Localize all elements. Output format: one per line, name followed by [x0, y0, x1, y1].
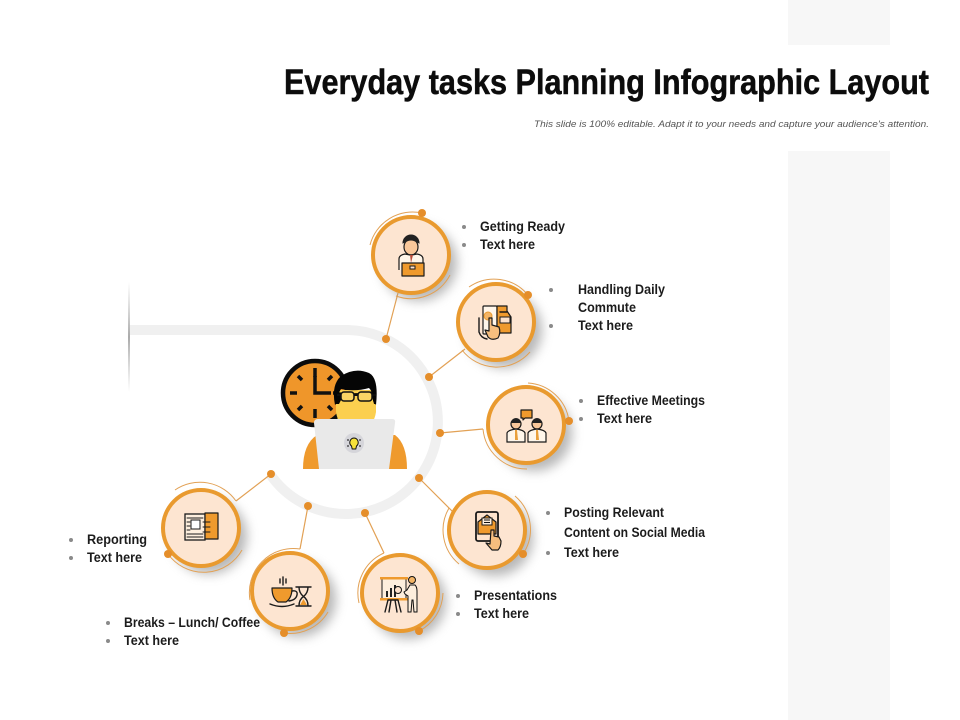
- node 6: breaks: [249, 548, 336, 637]
- icon: person: [303, 371, 407, 469]
- icon: tablet with mail and hand: [476, 512, 501, 550]
- node 2: handling daily commute: [458, 279, 542, 368]
- label: handling daily commute: Handling Daily: [578, 282, 665, 297]
- node 5: presentations: [358, 553, 446, 639]
- label: effective meetings: Effective Meetings: [597, 393, 705, 408]
- label: posting relevant content: Posting Relevant: [564, 505, 664, 520]
- right side grey panel: [788, 0, 890, 720]
- node 3: effective meetings: [483, 383, 573, 471]
- label: getting ready: [462, 219, 565, 252]
- icon: report documents: [185, 513, 218, 540]
- label: breaks: Text here: [124, 633, 179, 648]
- label: posting relevant content: [546, 505, 705, 560]
- label: handling daily commute: [549, 282, 665, 333]
- icon: coffee cup and hourglass: [270, 577, 311, 606]
- label: presentations: [456, 588, 557, 621]
- subtitle: This slide is 100% editable. Adapt it to your needs and capture your audience's attention.: [534, 119, 929, 130]
- central ring track: [128, 282, 438, 514]
- label: presentations: Text here: [474, 606, 529, 621]
- label: effective meetings: Text here: [597, 411, 652, 426]
- node 1: getting ready: [370, 209, 457, 301]
- icon: two people talking: [507, 410, 546, 442]
- label: breaks: [106, 615, 260, 648]
- label: reporting: Reporting: [87, 532, 147, 547]
- node 4: posting relevant content: [443, 492, 533, 576]
- label: reporting: [69, 532, 147, 565]
- label: presentations: Presentations: [474, 588, 557, 603]
- label: effective meetings: [579, 393, 705, 426]
- icon: clock: [283, 361, 347, 425]
- central figure: person with clock and laptop: [283, 361, 407, 469]
- label: breaks: Breaks – Lunch/ Coffee: [124, 615, 260, 630]
- label: handling daily commute: Text here: [578, 318, 633, 333]
- icon: presenter at board: [380, 576, 417, 612]
- label: handling daily commute: Commute: [578, 300, 636, 315]
- icon: laptop with light bulb: [314, 419, 395, 469]
- label: getting ready: Text here: [480, 237, 535, 252]
- label: posting relevant content: Text here: [564, 545, 619, 560]
- label: getting ready: Getting Ready: [480, 219, 565, 234]
- node 7: reporting: [163, 482, 247, 574]
- icon: employee with briefcase: [399, 235, 424, 276]
- label: reporting: Text here: [87, 550, 142, 565]
- label: posting relevant content: Content on Social Media: [564, 525, 705, 540]
- connector lines and nodes: [236, 293, 483, 553]
- icon: phone with car and hand: [479, 306, 511, 339]
